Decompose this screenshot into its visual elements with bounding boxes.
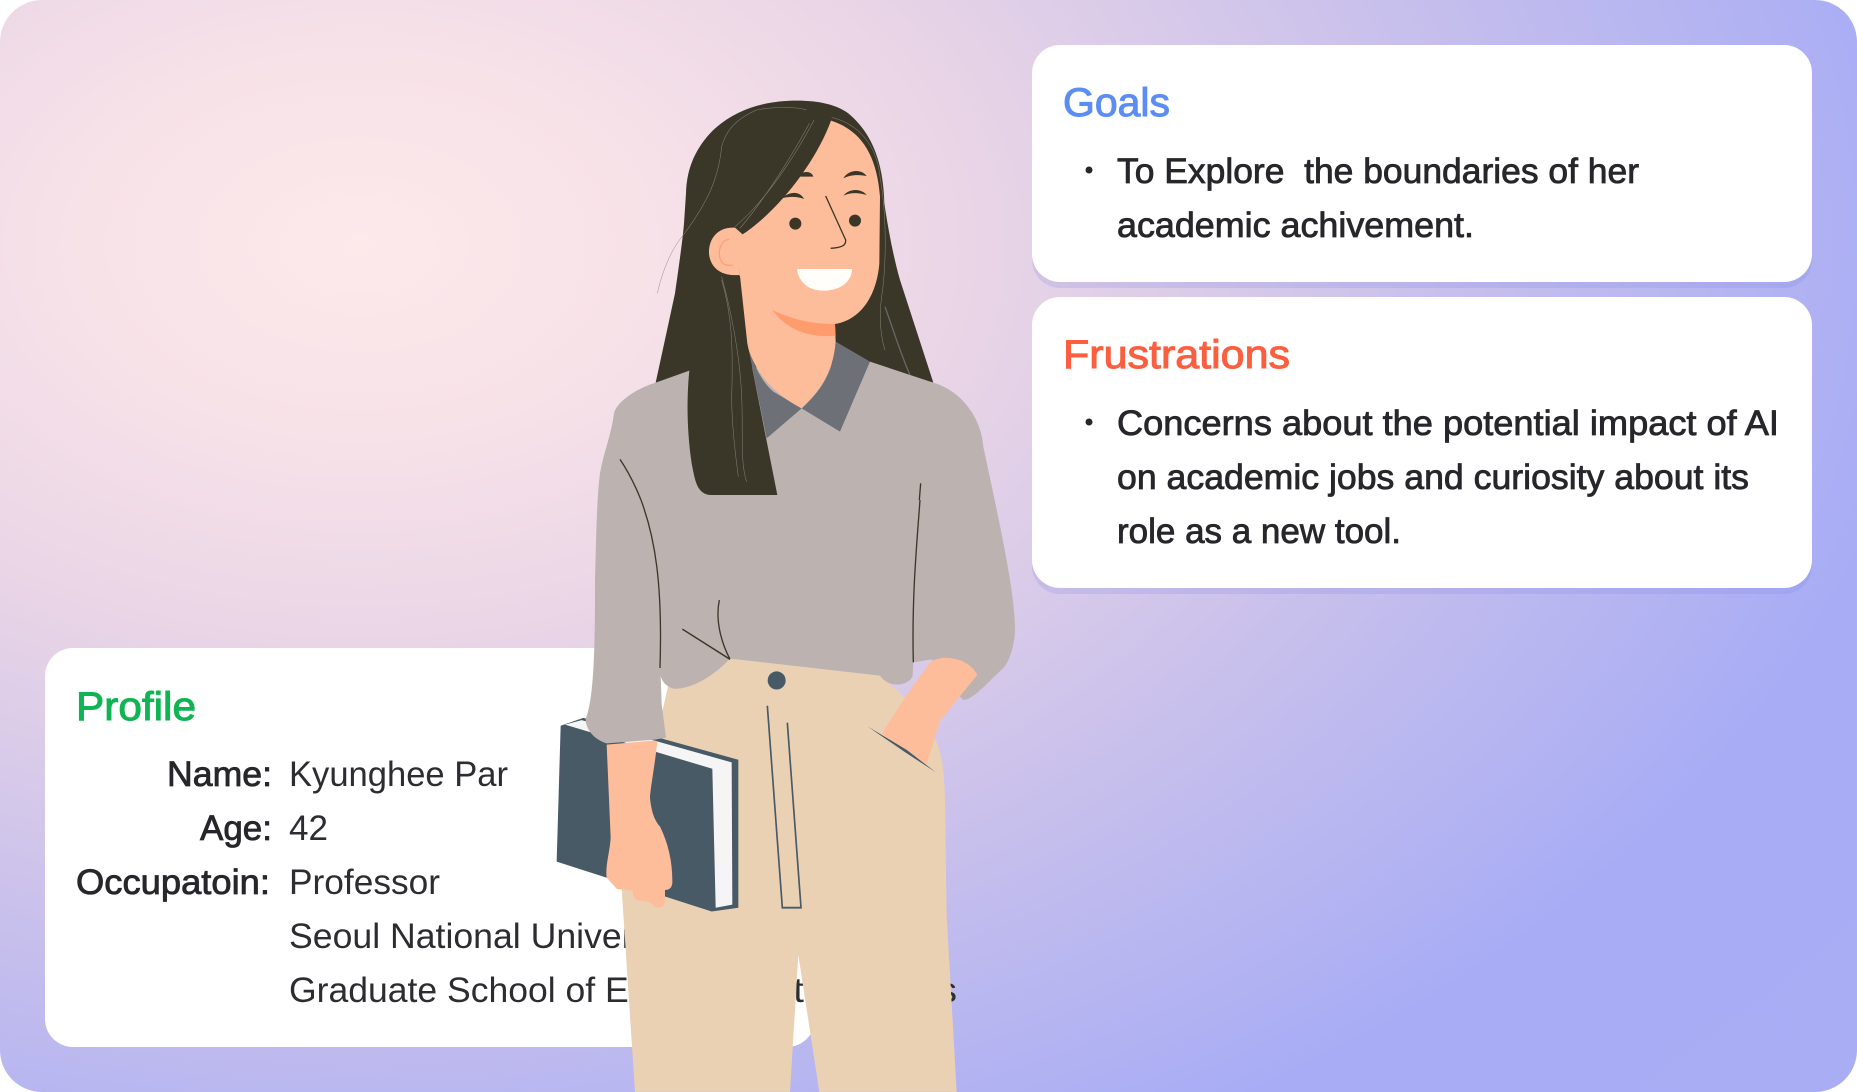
profile values: Graduate School of Education bbox=[289, 971, 763, 1010]
profile values: Seoul National University bbox=[289, 917, 688, 956]
hair strands bbox=[657, 107, 910, 482]
ear bbox=[709, 228, 743, 275]
frustrations bullet text bbox=[1086, 404, 1779, 551]
front hair lock bbox=[688, 274, 777, 495]
book bbox=[557, 718, 738, 911]
collar bbox=[747, 342, 870, 438]
illustration: woman holding a book bbox=[557, 101, 1015, 1092]
profile values: Professor bbox=[289, 863, 440, 902]
heading: profile: Profile bbox=[76, 685, 196, 729]
profile labels: Occupatoin: bbox=[76, 863, 270, 902]
profile labels: Name: bbox=[167, 755, 272, 794]
nose bbox=[826, 196, 846, 248]
profile values: Kyunghee Par bbox=[289, 755, 508, 794]
profile labels bbox=[76, 755, 272, 902]
profile labels: Age: bbox=[200, 809, 272, 848]
goals bullet text: To Explore the boundaries of her bbox=[1117, 152, 1639, 191]
frustrations bullet text: on academic jobs and curiosity about its bbox=[1117, 458, 1749, 497]
frustrations bullet text: role as a new tool. bbox=[1117, 512, 1401, 551]
blouse bbox=[586, 362, 1015, 743]
goals bullet text bbox=[1086, 152, 1639, 245]
profile values bbox=[289, 755, 957, 1010]
heading: goals: Goals bbox=[1063, 81, 1170, 125]
face and neck bbox=[709, 121, 880, 408]
heading: frustrations: Frustrations bbox=[1063, 333, 1290, 377]
chin shadow bbox=[772, 310, 836, 336]
eyes bbox=[789, 215, 861, 230]
panel: goals bbox=[1032, 45, 1812, 288]
back hair bbox=[656, 101, 933, 383]
profile values: 42 bbox=[289, 809, 328, 848]
blouse fold lines bbox=[641, 500, 920, 668]
trouser details bbox=[767, 671, 801, 908]
smile bbox=[797, 269, 852, 291]
frustrations bullet text: Concerns about the potential impact of AI bbox=[1117, 404, 1779, 443]
hand in pocket bbox=[868, 658, 977, 772]
profile values: at Campus bbox=[772, 971, 957, 1010]
arm and hand holding book bbox=[606, 740, 672, 908]
panel: frustrations bbox=[1032, 297, 1812, 594]
panel: profile bbox=[45, 648, 957, 1047]
trousers bbox=[622, 659, 957, 1092]
eyebrows and creases bbox=[782, 171, 867, 199]
goals bullet text: academic achivement. bbox=[1117, 206, 1474, 245]
